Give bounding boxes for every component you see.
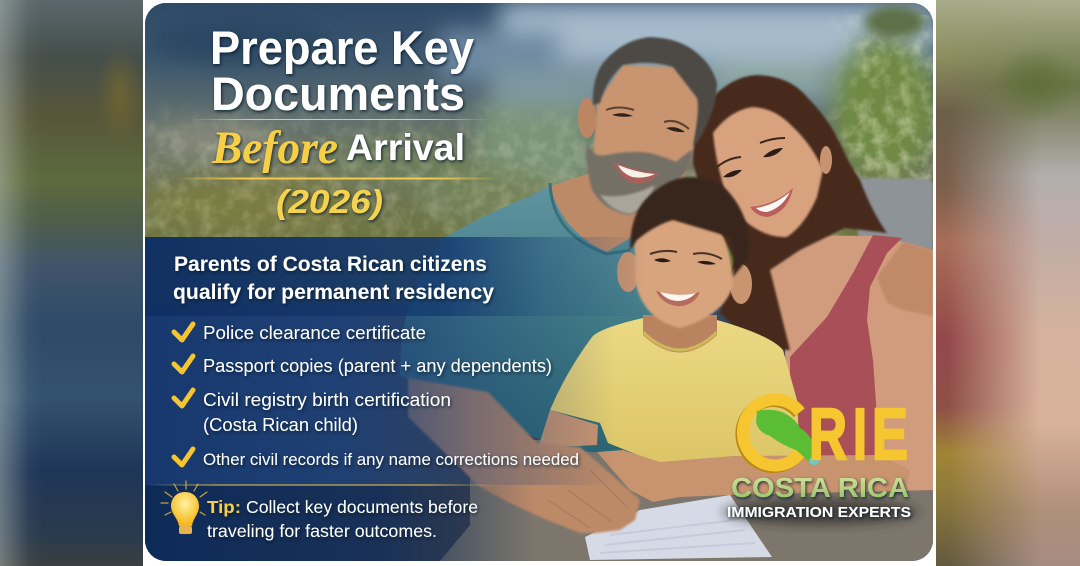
photo: family at table — [140, 3, 940, 561]
logo C ring — [741, 400, 800, 467]
checklist text: Civil registry birth certification — [203, 390, 451, 410]
panel heading text: qualify for permanent residency — [173, 281, 494, 304]
checklist text: Passport copies (parent + any dependents) — [203, 356, 552, 376]
table — [440, 490, 933, 561]
photo base — [145, 3, 933, 561]
logo: CRIE Costa Rica Immigration Experts — [727, 395, 911, 521]
icon: light bulb — [161, 481, 207, 534]
logo backing shadow — [722, 499, 918, 525]
tip text: traveling for faster outcomes. — [207, 521, 437, 541]
icon: Costa Rica map — [756, 410, 819, 466]
checklist text: Other civil records if any name corrections needed — [203, 450, 579, 469]
boy's arms — [538, 410, 598, 448]
tree branches top right — [865, 6, 925, 38]
boy — [550, 177, 800, 465]
tip text — [207, 497, 478, 541]
logo tagline: IMMIGRATION EXPERTS — [727, 504, 911, 521]
panel: tip band — [145, 485, 535, 561]
logo RIE letters: I — [853, 395, 867, 475]
check icons — [174, 324, 193, 465]
background: forest and sky — [145, 3, 933, 272]
man head — [578, 37, 717, 215]
panel heading text — [173, 253, 494, 304]
lower left dark seat — [145, 436, 540, 561]
title: (2026) — [276, 183, 383, 220]
title rule lower — [175, 178, 500, 180]
title: Arrival — [346, 127, 465, 168]
logo RIE letters: E — [872, 395, 908, 475]
checklist — [174, 323, 579, 469]
tip text: Tip: — [207, 497, 241, 517]
man torso — [400, 174, 655, 455]
title: Before — [211, 122, 338, 174]
blurred left backdrop — [0, 0, 143, 566]
title: Documents — [211, 67, 465, 120]
blurred right backdrop — [936, 0, 1080, 566]
title: Prepare Key — [210, 21, 474, 74]
tip text: Collect key documents before — [246, 497, 478, 517]
couch — [850, 178, 933, 250]
logo RIE letters — [809, 395, 908, 475]
panel: heading band — [145, 237, 645, 316]
title rule upper — [190, 119, 490, 120]
document on table — [585, 495, 772, 560]
woman — [693, 75, 933, 495]
checklist text: (Costa Rican child) — [203, 415, 358, 435]
checklist text: Police clearance certificate — [203, 323, 426, 343]
table base — [470, 440, 933, 561]
panel heading text: Parents of Costa Rican citizens — [174, 253, 487, 276]
man's forearm and hand — [408, 378, 640, 533]
logo Costa Rica: COSTA RICA — [731, 472, 909, 503]
title — [210, 21, 474, 220]
panel: checklist band — [145, 316, 615, 485]
gold divider above tip — [145, 484, 500, 486]
checklist text — [203, 323, 579, 469]
logo RIE letters: R — [809, 395, 847, 475]
man's hand on shoulder — [877, 242, 933, 316]
